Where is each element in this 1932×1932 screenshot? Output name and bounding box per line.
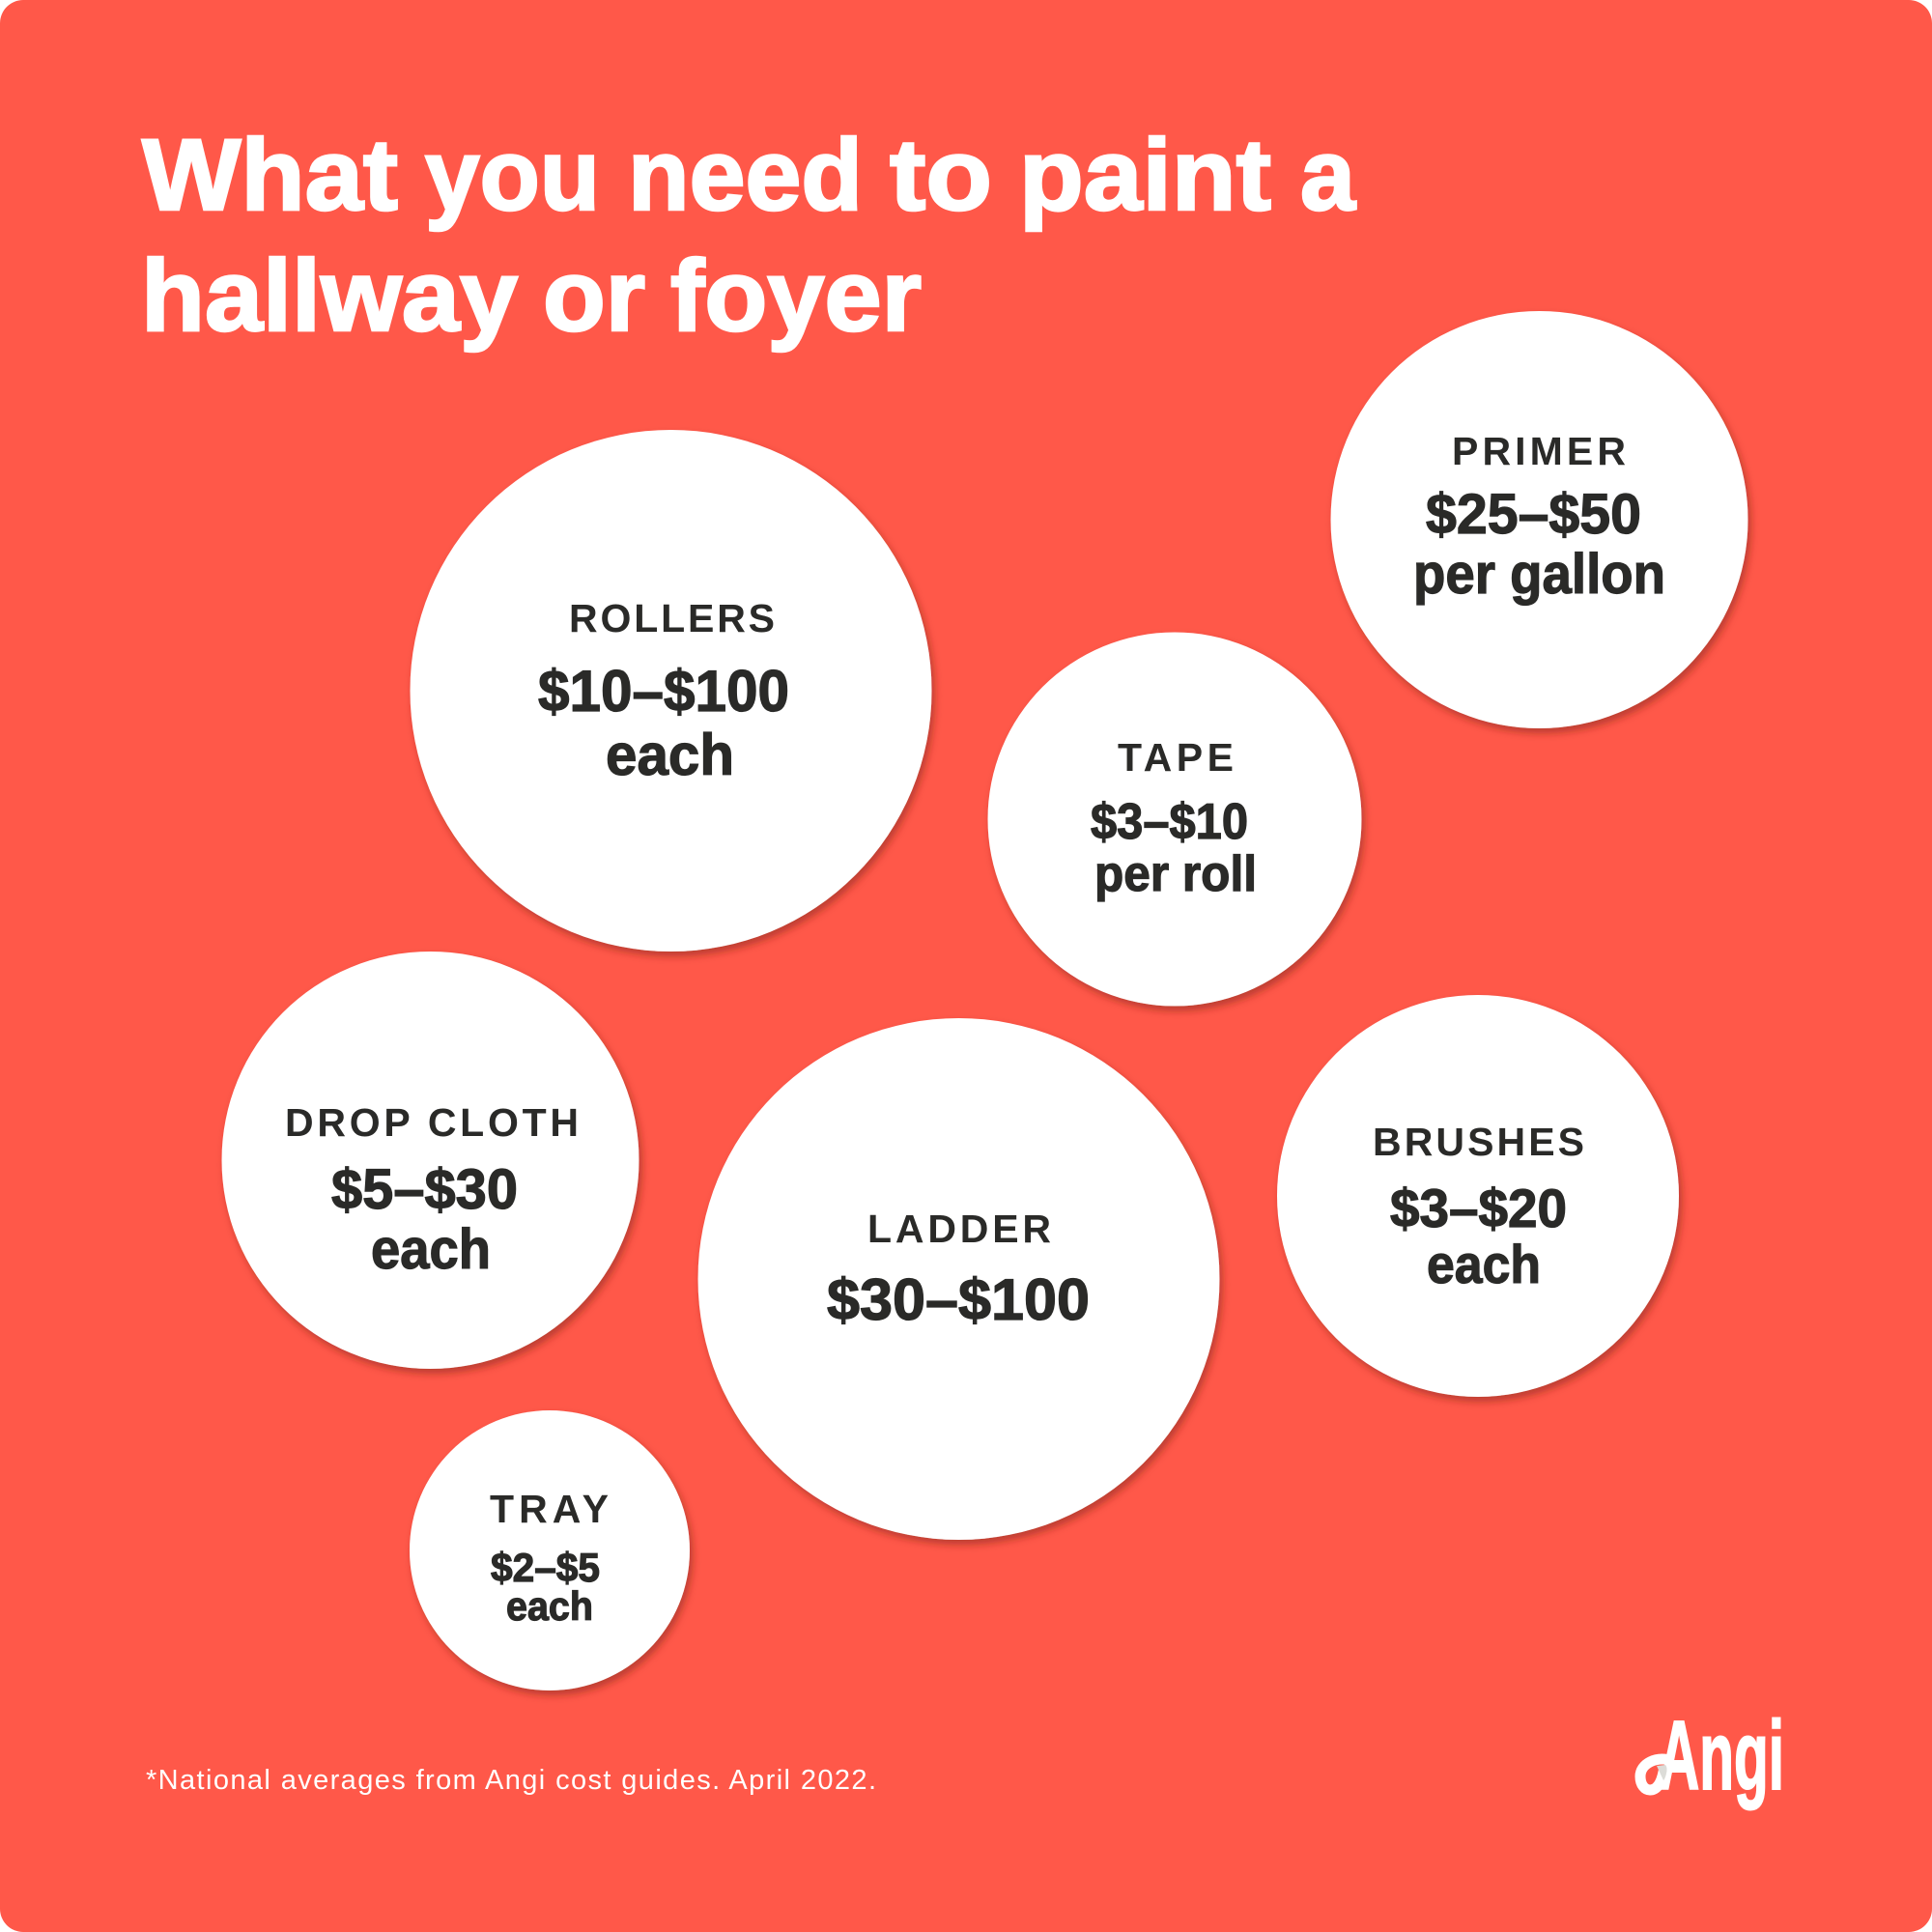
bubble: tray: $2–$5 xyxy=(491,1545,600,1590)
footnote: *National averages from Angi cost guides. April 2022. xyxy=(146,1765,876,1796)
bubble: drop cloth xyxy=(222,952,639,1369)
bubble: brushes: each xyxy=(1427,1234,1541,1294)
bubble: primer: PRIMER xyxy=(1452,429,1626,473)
bubble: rollers: each xyxy=(606,723,734,787)
title: hallway xyxy=(141,240,518,353)
title xyxy=(141,119,1357,353)
bubble: drop cloth: each xyxy=(371,1218,491,1281)
bubble: drop cloth: DROP CLOTH xyxy=(285,1100,579,1145)
bubble: rollers xyxy=(410,430,931,952)
title: or xyxy=(543,240,645,353)
bubble: rollers: ROLLERS xyxy=(569,596,775,640)
bubble: tray: TRAY xyxy=(490,1487,609,1531)
title: foyer xyxy=(670,240,922,353)
bubble: ladder xyxy=(697,1018,1219,1540)
bubble: tray: each xyxy=(506,1583,593,1629)
title: a xyxy=(1300,119,1357,232)
title: paint xyxy=(1019,119,1271,232)
bubble: ladder: LADDER xyxy=(867,1207,1051,1251)
title: What xyxy=(142,119,398,232)
bubble: tape: $3–$10 xyxy=(1091,794,1248,850)
bubble: tape: TAPE xyxy=(1118,735,1234,780)
bubble: primer: per gallon xyxy=(1413,543,1665,606)
logo: Angi xyxy=(1640,1702,1784,1810)
logo: Angi: Angi xyxy=(1659,1702,1784,1810)
bubble: brushes: BRUSHES xyxy=(1373,1120,1584,1164)
bubble: brushes: $3–$20 xyxy=(1390,1178,1567,1238)
bubble: primer: $25–$50 xyxy=(1426,483,1641,546)
bubble: tape xyxy=(987,632,1362,1007)
bubble: primer xyxy=(1331,311,1748,728)
title: need xyxy=(628,119,863,232)
bubble: brushes xyxy=(1277,995,1679,1397)
bubble: drop cloth: $5–$30 xyxy=(331,1158,518,1221)
bubble: tray xyxy=(410,1410,690,1690)
bubble: rollers: $10–$100 xyxy=(538,659,789,724)
title: to xyxy=(890,119,992,232)
title: you xyxy=(425,119,600,232)
bubble: tape: per roll xyxy=(1094,846,1257,902)
bubble: ladder: $30–$100 xyxy=(827,1267,1090,1332)
